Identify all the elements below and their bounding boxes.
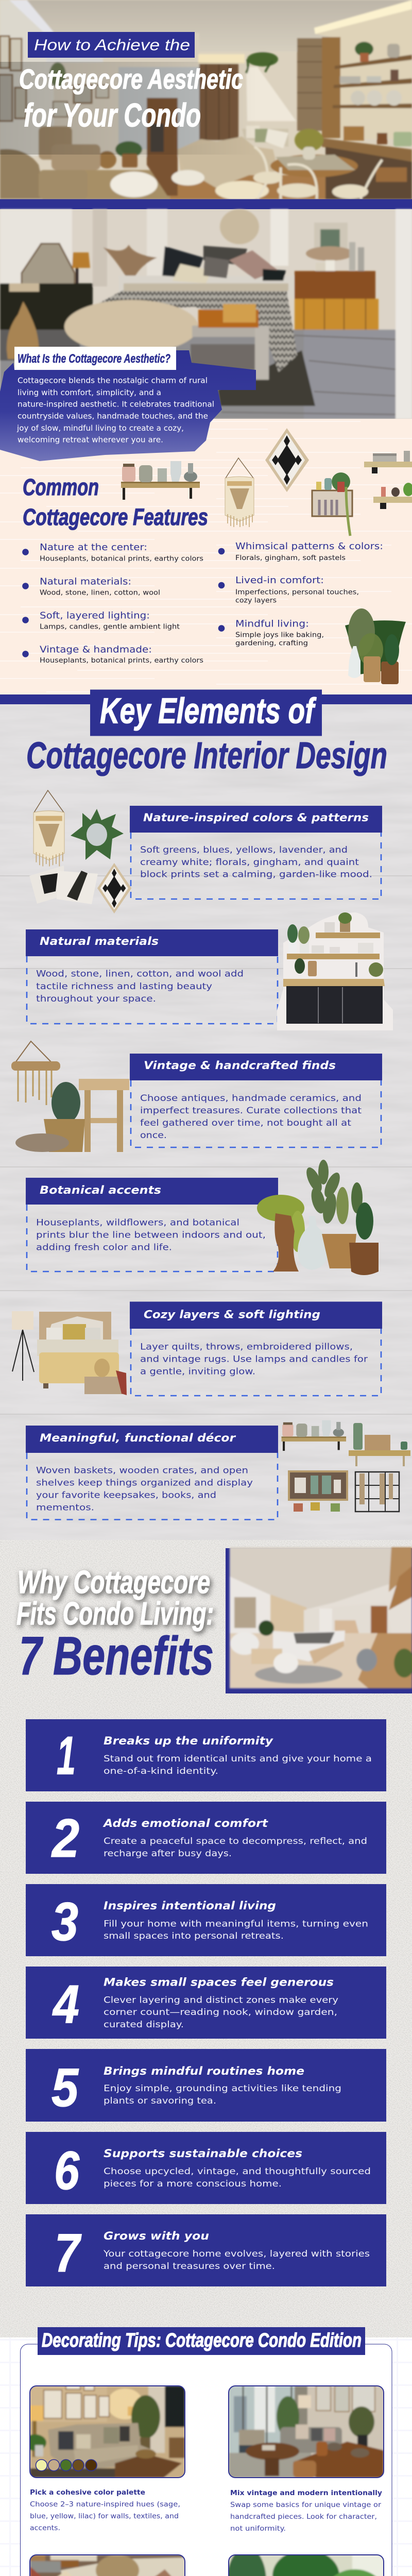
panel: Vintage & handcrafted finds	[130, 1054, 382, 1147]
panel: Natural materials: Natural materials	[40, 935, 159, 947]
feature: Vintage & handmade	[22, 645, 203, 665]
panel: Cozy layers & soft lighting: a gentle, inviting glow.	[140, 1366, 255, 1377]
panel: grey wood background	[0, 704, 412, 1540]
blue divider band	[0, 199, 412, 209]
feature: Natural materials: Natural materials:	[40, 577, 131, 587]
benefit card 3: small spaces into personal retreats.	[104, 1931, 284, 1941]
benefit card 2	[26, 1802, 386, 1874]
text block: cottagecore definition: countryside values, handmade touches, and the	[18, 411, 208, 420]
benefit card 6: Choose upcycled, vintage, and thoughtfully sourced	[104, 2166, 371, 2177]
feature: Mindful living	[218, 619, 324, 648]
tip 1: color palette	[24, 2383, 185, 2532]
heading: Decorating Tips	[38, 2327, 365, 2355]
benefit card 7: 7	[55, 2223, 82, 2283]
benefit card 7: and personal treasures over time.	[104, 2261, 275, 2272]
text block: cottagecore definition: nature-inspired aesthetic. It celebrates traditional	[18, 400, 214, 409]
panel: Meaningful, functional décor: shelves keep things organized and display	[36, 1478, 253, 1488]
benefit card 6: Supports sustainable choices	[104, 2147, 302, 2160]
panel: Meaningful, functional décor: your favorite keepsakes, books, and	[36, 1490, 216, 1501]
panel: Botanical accents	[26, 1178, 278, 1272]
blue paint brush stroke	[0, 350, 256, 461]
heading: Why Cottagecore Fits Condo Living: Fits Condo Living:	[16, 1596, 214, 1632]
panel: Cozy layers & soft lighting: Cozy layers & soft lighting	[144, 1309, 320, 1321]
feature: Nature at the center	[22, 543, 203, 563]
photo: condo living and dining	[229, 2386, 384, 2478]
icon: shelf with jars	[121, 461, 200, 500]
title box: How to Achieve the	[28, 32, 195, 58]
title box: How to Achieve the: How to Achieve the	[34, 36, 190, 54]
panel: Natural materials: Wood, stone, linen, cotton, and wool add	[36, 969, 244, 979]
tip 1: color palette: Choose 2–3 nature-inspired hues (sage,	[30, 2500, 180, 2509]
feature: Vintage & handmade: Vintage & handmade:	[40, 645, 152, 655]
panel: Meaningful, functional décor	[26, 1426, 278, 1520]
feature: Mindful living: Mindful living:	[235, 619, 309, 630]
tip 2: vintage and modern: Swap some basics for unique vintage or	[230, 2501, 381, 2509]
panel: Natural materials: tactile richness and lasting beauty	[36, 981, 212, 992]
tip 4: outdoors in	[228, 2554, 384, 2576]
tip 1: color palette: blue, yellow, lilac) for walls, textiles, and	[30, 2512, 179, 2520]
panel: Nature-inspired colors & patterns: block prints set a calming, garden-like mood.	[140, 870, 372, 880]
feature: Soft, layered lighting: Soft, layered lighting:	[40, 611, 150, 621]
benefit card 2: 2	[51, 1808, 79, 1869]
benefit card 1	[26, 1719, 386, 1791]
feature: Natural materials: Wood, stone, linen, cotton, wool	[40, 589, 160, 597]
feature: Natural materials	[22, 577, 160, 597]
feature: Nature at the center: Houseplants, botanical prints, earthy colors	[40, 555, 203, 563]
panel: Vintage & handcrafted finds: Vintage & handcrafted finds	[144, 1059, 336, 1072]
heading: Common Cottagecore Features: Cottagecore Features	[23, 504, 208, 530]
palette swatches	[36, 2460, 97, 2471]
icon: botanical plants in pots	[257, 1160, 379, 1275]
panel: Cozy layers & soft lighting: and vintage rugs. Use lamps and candles for	[140, 1354, 368, 1364]
panel: Botanical accents: Houseplants, wildflowers, and botanical	[36, 1218, 239, 1228]
photo: rug, throw and poufs	[30, 2555, 185, 2576]
heading: Key Elements of	[90, 689, 322, 736]
benefit card 3	[26, 1884, 386, 1956]
icon: kitchen illustration	[277, 912, 393, 1030]
benefit card 1: Stand out from identical units and give your home a	[104, 1754, 372, 1764]
benefit card 5: plants or savoring tea.	[104, 2096, 216, 2106]
benefit card 6: 6	[54, 2141, 79, 2201]
icon: cube shelf with plant	[312, 472, 352, 536]
benefit card 6	[26, 2132, 386, 2204]
benefit card 5: 5	[52, 2058, 79, 2118]
feature: Whimsical patterns & colors: Florals, gingham, soft pastels	[235, 554, 346, 562]
panel: hero photo of cottagecore condo	[0, 0, 412, 200]
panel: Botanical accents: adding fresh color and life.	[36, 1243, 172, 1253]
panel: Nature-inspired colors & patterns	[130, 806, 382, 899]
panel: Vintage & handcrafted finds: imperfect treasures. Curate collections that	[140, 1106, 362, 1116]
feature: Lived-in comfort: Lived-in comfort:	[235, 575, 324, 586]
feature: Whimsical patterns & colors: Whimsical patterns & colors:	[235, 541, 383, 552]
benefit card 5: Brings mindful routines home	[104, 2065, 304, 2077]
benefit card 4: corner count—reading nook, window garden,	[104, 2007, 337, 2018]
panel: Vintage & handcrafted finds: feel gathered over time, not bought all at	[140, 1118, 351, 1128]
tip 1: color palette: Pick a cohesive color palette	[30, 2488, 145, 2497]
panel: cream features background	[0, 419, 412, 694]
benefit card 5: Enjoy simple, grounding activities like tending	[104, 2083, 341, 2094]
benefit card 4: curated display.	[104, 2020, 184, 2030]
icon: hanger, plant, stool and basket	[11, 1041, 129, 1152]
heading: Why Cottagecore Fits Condo Living	[16, 1565, 214, 1632]
icon: bed and floor lamp	[12, 1311, 127, 1395]
benefit card 4: Clever layering and distinct zones make every	[104, 1995, 338, 2005]
panel: Nature-inspired colors & patterns: creamy white; florals, gingham, and quaint	[140, 857, 359, 868]
icon: wall hanging	[225, 458, 254, 527]
benefit card 4	[26, 1967, 386, 2039]
subtitle: What Is the Cottagecore Aesthetic?: What Is the Cottagecore Aesthetic?	[18, 352, 170, 366]
icon: diamond wall art	[265, 428, 309, 492]
tip 2: vintage and modern: Mix vintage and modern intentionally	[230, 2489, 382, 2497]
text block: cottagecore definition: joy of slow, mindful living to create a cozy,	[16, 423, 184, 433]
feature: Soft, layered lighting: Lamps, candles, gentle ambient light	[40, 623, 180, 631]
feature: Lived-in comfort: cozy layers	[235, 597, 277, 605]
panel: Meaningful, functional décor: mementos.	[36, 1503, 94, 1513]
benefit card 7: Grows with you	[104, 2230, 209, 2242]
benefit card 1: one-of-a-kind identity.	[104, 1766, 218, 1776]
benefit card 3: Inspires intentional living	[104, 1900, 276, 1912]
photo: living room with palette swatches	[24, 2383, 185, 2478]
panel: Meaningful, functional décor: Woven baskets, wooden crates, and open	[36, 1466, 248, 1476]
panel: tips background grid	[0, 2337, 412, 2576]
feature: Soft, layered lighting	[22, 611, 180, 631]
panel: Botanical accents: prints blur the line between indoors and out,	[36, 1230, 266, 1241]
benefit card 3: 3	[52, 1892, 78, 1952]
feature: Mindful living: gardening, crafting	[235, 640, 308, 648]
text block: cottagecore definition: living with comfort, simplicity, and a	[18, 388, 161, 397]
text block: cottagecore definition	[16, 376, 214, 445]
benefit card 2: Adds emotional comfort	[102, 1817, 268, 1829]
benefit card 1: 1	[57, 1726, 76, 1786]
heading: 7 Benefits: 7 Benefits	[19, 1626, 214, 1686]
photo: indoor plants in baskets	[228, 2554, 384, 2576]
tip 3: layer textures	[30, 2555, 185, 2576]
benefit card 7	[26, 2214, 386, 2286]
feature: Lived-in comfort: Imperfections, personal touches,	[235, 588, 359, 596]
subtitle: What Is the Cottagecore Aesthetic?	[14, 347, 176, 370]
panel: Nature-inspired colors & patterns: Soft greens, blues, yellows, lavender, and	[140, 845, 348, 855]
feature: Vintage & handmade: Houseplants, botanical prints, earthy colors	[40, 657, 203, 665]
panel: Vintage & handcrafted finds: once.	[140, 1130, 167, 1141]
text block: cottagecore definition: Cottagecore blends the nostalgic charm of rural	[18, 376, 208, 385]
blue divider band	[0, 694, 412, 704]
feature: Mindful living: Simple joys like baking,	[235, 631, 324, 639]
tip 2: vintage and modern: handcrafted pieces. Look for character,	[230, 2513, 377, 2521]
panel: Nature-inspired colors & patterns: Nature-inspired colors & patterns	[143, 811, 369, 824]
benefit card 1: Breaks up the uniformity	[104, 1735, 273, 1747]
heading: Why Cottagecore Fits Condo Living: Why Cottagecore	[18, 1565, 210, 1600]
panel: Meaningful, functional décor: Meaningful, functional décor	[40, 1432, 236, 1444]
panel: Natural materials: throughout your space.	[36, 994, 156, 1004]
feature: Lived-in comfort	[218, 575, 359, 605]
benefit card 4: 4	[52, 1974, 79, 2035]
icon: potted plants	[345, 608, 406, 684]
panel: tips white card	[21, 2344, 392, 2576]
heading: Key Elements of: Key Elements of	[100, 690, 317, 731]
benefit card 7: Your cottagecore home evolves, layered with stories	[103, 2249, 370, 2259]
benefit card 6: pieces for a more conscious home.	[104, 2179, 282, 2189]
panel: Botanical accents: Botanical accents	[40, 1184, 161, 1196]
panel: Vintage & handcrafted finds: Choose antiques, handmade ceramics, and	[140, 1093, 362, 1104]
icon: hanging, mirror, pillows and diamond decor	[29, 790, 131, 913]
icon: shelves, cubby and utensil rack	[282, 1420, 410, 1512]
panel: condo bedroom photo with blue frame	[226, 1547, 412, 1693]
feature: Whimsical patterns & colors	[218, 541, 383, 562]
panel: Cozy layers & soft lighting	[130, 1301, 382, 1396]
heading: Common Cottagecore Features: Common	[23, 474, 99, 500]
title: Cottagecore Aesthetic for Your Condo: Cottagecore Aesthetic	[19, 64, 243, 95]
tip 1: color palette: accents.	[30, 2524, 60, 2532]
benefit card 2: Create a peaceful space to decompress, reflect, and	[104, 1836, 367, 1846]
tip 2: vintage and modern: not uniformity.	[230, 2524, 286, 2533]
feature: Nature at the center: Nature at the center:	[40, 543, 147, 553]
heading: Common Cottagecore Features	[23, 474, 208, 530]
icon: wall shelves	[364, 451, 412, 509]
benefit card 4: Makes small spaces feel generous	[104, 1976, 334, 1989]
panel: bedroom photo	[0, 209, 412, 419]
panel: Natural materials	[26, 929, 278, 1024]
benefit card 5	[26, 2049, 386, 2122]
title: Cottagecore Aesthetic for Your Condo	[19, 64, 243, 134]
benefit card 2: recharge after busy days.	[104, 1849, 232, 1859]
panel: knit fabric background	[0, 1540, 412, 2337]
panel: Cozy layers & soft lighting: Layer quilts, throws, embroidered pillows,	[140, 1342, 353, 1352]
text block: cottagecore definition: welcoming retreat wherever you are.	[18, 435, 163, 445]
tip 2: vintage and modern	[229, 2386, 384, 2533]
title: Cottagecore Aesthetic for Your Condo: for Your Condo	[24, 97, 201, 134]
benefit card 3: Fill your home with meaningful items, turning even	[104, 1919, 368, 1929]
